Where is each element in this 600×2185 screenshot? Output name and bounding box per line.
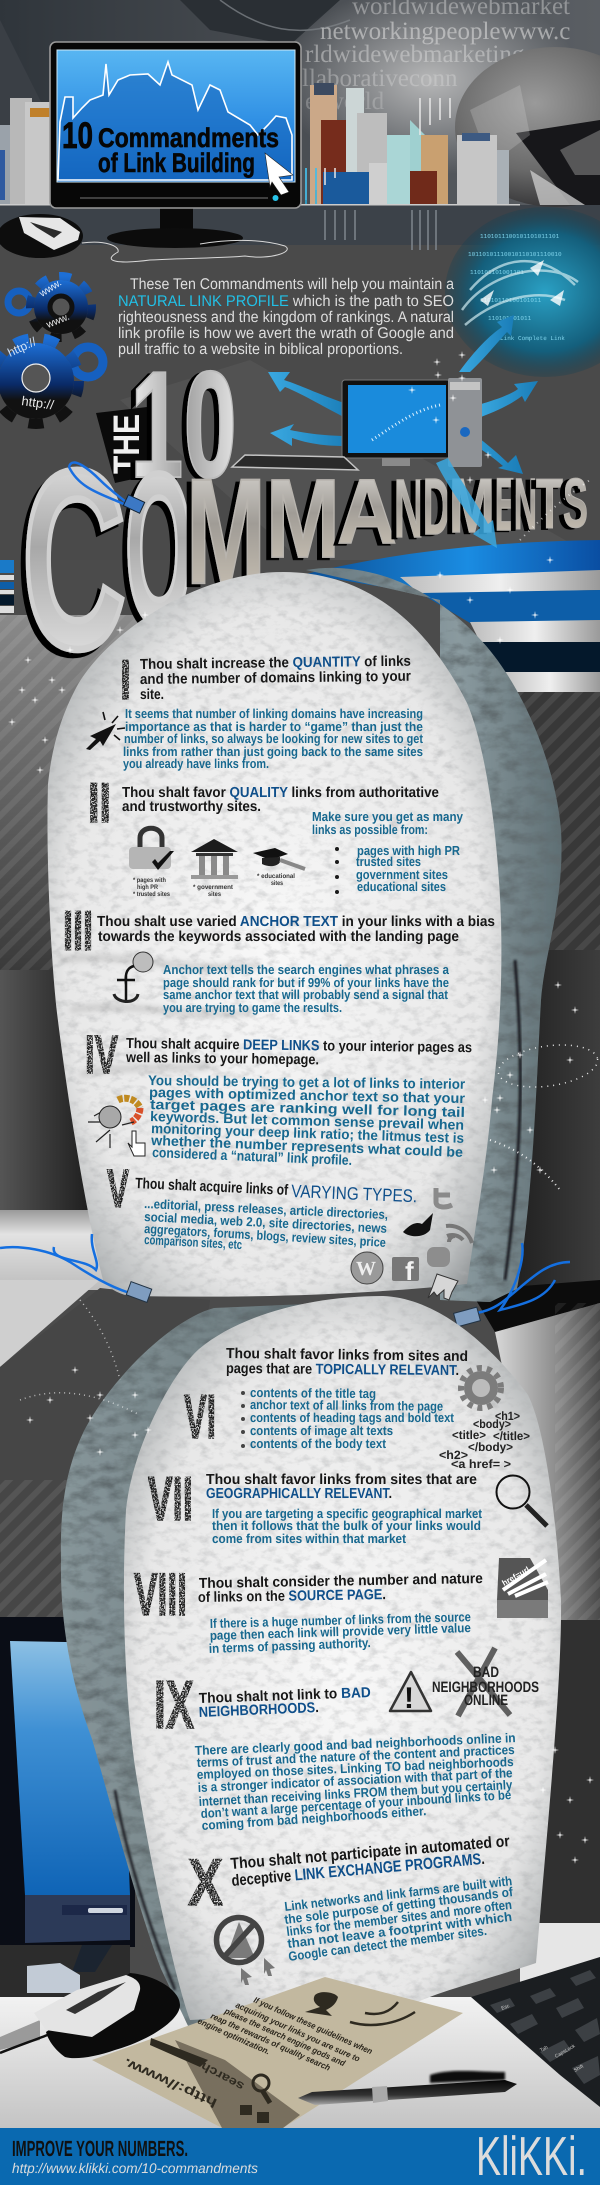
code tags: <body> [473, 1417, 511, 1431]
body text IX: don’t want a large percentage of your inbound links to be [200, 1787, 512, 1821]
note text: If you follow these guidelines when [252, 1995, 374, 2056]
icon captions: * pages with [133, 877, 166, 884]
body text I: It seems that number of linking domains have increasing [125, 706, 423, 721]
note text: reap the rewards of quality search [209, 2011, 332, 2073]
icon: keyboard: Shift [573, 2063, 585, 2074]
note doodles [150, 1992, 415, 2123]
icon: blue network cables [0, 1234, 570, 1327]
body text VII [212, 1506, 483, 1546]
icon captions [133, 873, 295, 898]
heading II: Thou shalt favor QUALITY links from authoritative [122, 785, 439, 801]
title: COMMANDMENTS: N [514, 463, 537, 545]
binary blue globe: 110101101001101 [470, 269, 524, 276]
intro paragraph: pull traffic to a website in biblical proportions. [118, 341, 403, 358]
icon: white cursor [265, 153, 293, 195]
body text X [284, 1873, 514, 1964]
icon: www gear: www. [44, 312, 71, 331]
icon: warning triangle: ! [404, 1682, 414, 1715]
body text IX: coming from bad neighborhoods either. [201, 1803, 427, 1833]
heading V: VARYING TYPES. [291, 1181, 418, 1206]
heading III [97, 914, 495, 945]
commandment VI [184, 1346, 530, 1471]
heading IV: well as links to your homepage. [125, 1050, 319, 1068]
numeral IV: IV [85, 1025, 118, 1085]
body text VI [250, 1385, 455, 1451]
title: COMMANDMENTS: O [125, 430, 193, 669]
binary blue globe: 10110101110010110101110010 [468, 251, 562, 258]
body text I: links from rather than just going back to the same sites [123, 744, 423, 759]
tablet one side [306, 568, 562, 1302]
body text IV: considered a “natural” link profile. [152, 1144, 352, 1168]
intro paragraph: righteousness and the kingdom of rankings. A natural [118, 309, 454, 326]
body text IX [195, 1730, 516, 1833]
note text: engine optimization. [196, 2016, 272, 2057]
icon captions: sites [271, 880, 283, 887]
background web words [302, 0, 570, 115]
body text III: same anchor text that will probably send a signal that [163, 987, 449, 1002]
tablet one face [47, 572, 501, 1297]
heading VI: pages that are TOPICALLY RELEVANT. [226, 1361, 459, 1379]
binary blue globe: 110101001011 [488, 315, 532, 322]
heading III: towards the keywords associated with the landing page [98, 929, 459, 945]
icon captions: high PR [137, 884, 158, 891]
monitor with title [50, 42, 301, 248]
intro paragraph: These Ten Commandments will help you maintain a [130, 276, 454, 293]
footer slogan: IMPROVE YOUR NUMBERS. [12, 2136, 188, 2161]
right city skyline [0, 83, 520, 250]
heading X: deceptive LINK EXCHANGE PROGRAMS. [231, 1851, 485, 1890]
body text III: you are trying to game the results. [163, 1000, 342, 1015]
icon: warning triangle [390, 1672, 431, 1715]
title: COMMANDMENTS: C [22, 419, 126, 703]
icon: keyboard [471, 1957, 600, 2107]
header backdrop [0, 0, 600, 560]
body text IX: terms of trust and the nature of the content and practices [197, 1742, 515, 1770]
side backdrops beside tablet one [0, 615, 600, 1930]
icon: www gear [8, 276, 92, 338]
body text II: government sites [356, 867, 448, 882]
body text V: ...editorial, press releases, article directories, [144, 1196, 388, 1222]
heading IX: Thou shalt not link to BAD [199, 1685, 371, 1707]
left city skyline [0, 98, 50, 205]
heading VIII [198, 1571, 483, 1606]
numeral V: V [107, 1159, 129, 1219]
icon: magnifier [496, 1476, 547, 1526]
ribbon stripes [0, 540, 600, 692]
body text IX: There are clearly good and bad neighborhoods online in [195, 1730, 516, 1758]
body text VI: contents of the body text [250, 1436, 387, 1451]
title: COMMANDMENTS: D [423, 462, 450, 552]
code tags: <title> [452, 1428, 486, 1442]
code tags [439, 1409, 530, 1471]
icon: clicking cursor [86, 712, 125, 750]
body text X: than not leave a footprint with which [287, 1909, 513, 1951]
icon: wordpress [351, 1252, 383, 1284]
body text VIII: in terms of passing authority. [209, 1635, 371, 1656]
body text II: educational sites [357, 879, 446, 894]
heading VIII: of links on the SOURCE PAGE. [198, 1587, 386, 1606]
title: COMMANDMENTS [22, 419, 588, 703]
body text VII: come from sites within that market [212, 1531, 407, 1546]
body text VII: If you are targeting a specific geographical market [212, 1506, 483, 1521]
note text [196, 1995, 374, 2073]
tablet two face [124, 1296, 561, 2020]
heading VII [206, 1472, 477, 1502]
numeral III: III [63, 899, 93, 962]
icon: link tray [497, 1558, 548, 1618]
body text IV: pages with optimized anchor text so that your [149, 1084, 466, 1106]
heading IV [125, 1036, 472, 1068]
commandment IX [154, 1648, 539, 1833]
icon: twitter [436, 1188, 452, 1207]
icon: bad neighborhoods stamp: BAD [473, 1664, 499, 1681]
note text: acquiring your links you are sure to [234, 2000, 362, 2064]
icon: anchor [114, 952, 153, 1003]
body text VI: contents of image alt texts [250, 1423, 393, 1438]
numeral I: I [120, 648, 131, 711]
commandment VII [148, 1465, 547, 1546]
heading X: Thou shalt not participate in automated or [230, 1833, 510, 1873]
commandment II [88, 771, 464, 898]
tablet two side [61, 1300, 400, 2030]
title: COMMANDMENTS: N [394, 462, 424, 555]
icon captions: * educational [257, 873, 295, 880]
icon: keyboard: CapsLock [554, 2043, 577, 2060]
title: COMMANDMENTS: M [186, 448, 266, 616]
note text: please the search engine gods and [222, 2005, 348, 2068]
left monitor [0, 1617, 135, 2000]
commandment V [107, 1159, 472, 1300]
numeral IX: IX [154, 1667, 194, 1743]
body text VI: anchor text of all links from the page [250, 1397, 443, 1414]
body text VIII: page then each link will provide very little value [210, 1620, 471, 1643]
icon: bird [403, 1213, 433, 1236]
icon: desk mouse [0, 1973, 180, 2058]
heading VII: Thou shalt favor links from sites that are [206, 1472, 477, 1488]
body text II [312, 809, 464, 894]
panel: tablet one [47, 568, 562, 1302]
heading II: and trustworthy sites. [122, 799, 261, 815]
icon captions: sites [208, 891, 221, 898]
title: 10: 10 [130, 340, 237, 510]
skyline outline on screen [58, 62, 292, 180]
numeral VIII: VIII [134, 1561, 187, 1628]
body text III [163, 962, 450, 1015]
icon: facebook: f [405, 1256, 414, 1286]
icon captions: * government [193, 884, 234, 891]
body text III: page should rank for but if 99% of your links have the [163, 975, 449, 990]
numeral II: II [88, 771, 111, 834]
doodle text: search: search [198, 2059, 246, 2094]
numeral VI: VI [184, 1383, 216, 1452]
body text II: Make sure you get as many [312, 809, 464, 824]
globe [455, 47, 600, 207]
icon: http gear: http:// [5, 334, 39, 360]
footer bar [0, 2125, 600, 2185]
icon: facebook [392, 1256, 419, 1286]
body text IV [148, 1072, 466, 1168]
commandment III [63, 899, 495, 1015]
title: COMMANDMENTS: M [449, 463, 495, 549]
body text I [123, 706, 424, 771]
icon: pen [298, 2071, 517, 2105]
body text IV: You should be trying to get a lot of links to interior [148, 1072, 466, 1092]
icon: keyboard: Esc [501, 2003, 511, 2012]
heading I: site. [140, 687, 164, 703]
icon: link hub with hand [88, 1098, 145, 1156]
body text II: links as possible from: [312, 822, 428, 837]
background web words: llaborativeconn [302, 65, 458, 92]
body text VI: contents of the title tag [250, 1385, 376, 1401]
heading I: and the number of domains linking to your [140, 669, 411, 688]
intro paragraph: NATURAL LINK PROFILE which is the path to SEO [118, 293, 454, 310]
code tags: <h2> [439, 1448, 468, 1462]
title: COMMANDMENTS: A [337, 460, 397, 563]
intro paragraph [118, 276, 454, 358]
icon: digg [428, 1274, 458, 1300]
arrow over letters [436, 458, 497, 548]
body text IV: target pages are ranking well for long tail [150, 1096, 465, 1120]
title: THE: THE [106, 414, 147, 474]
icon: www gear: www. [37, 278, 64, 300]
body text I: importance as that is harder to “game” than just the [125, 719, 423, 734]
commandment VIII [134, 1558, 548, 1656]
body text V [144, 1196, 388, 1252]
body text X: Link networks and link farms are built with [284, 1873, 513, 1914]
body text X: links for the member sites and more often [286, 1897, 513, 1939]
title: 10: 10 [62, 115, 93, 156]
body text IX: is a stronger indicator of association with that part of the [197, 1765, 513, 1795]
background web words: networkingpeoplewww.c [320, 18, 570, 45]
icon: lock with check [129, 828, 174, 870]
body text IV: whether the number represents what could be [150, 1132, 463, 1160]
icon: wordpress: W [356, 1258, 376, 1280]
body text I: you already have links from. [123, 756, 269, 771]
heading IX [198, 1685, 371, 1721]
blue arrows [268, 315, 538, 474]
heading I [140, 654, 411, 703]
heading I: Thou shalt increase the QUANTITY of links [140, 654, 411, 673]
title: of Link Building: of Link Building [98, 148, 255, 178]
bullets VI [241, 1391, 245, 1448]
heading VIII: Thou shalt consider the number and nature [199, 1571, 483, 1592]
bullets II [335, 847, 339, 894]
icon: top mouse [0, 214, 287, 262]
icon: blogger [427, 1247, 450, 1267]
body text V: comparison sites, etc [144, 1232, 242, 1252]
heading VI: Thou shalt favor links from sites and [226, 1346, 468, 1365]
code tags: </body> [468, 1440, 513, 1454]
body text IV: monitoring your deep link ratio; the litmus test is [151, 1120, 464, 1146]
commandment IV [85, 1025, 472, 1168]
icon: graduation cap [253, 848, 305, 869]
body text II: pages with high PR [357, 843, 461, 858]
title: COMMANDMENTS: T [536, 464, 563, 544]
heading IV: Thou shalt acquire DEEP LINKS to your interior pages as [126, 1036, 472, 1056]
commandment X [188, 1833, 514, 1985]
code tags: <h1> [495, 1409, 520, 1423]
doodle text: http: http://www. [121, 2055, 219, 2111]
heading III: Thou shalt use varied ANCHOR TEXT in your links with a bias [97, 914, 495, 930]
heading IX: NEIGHBORHOODS. [198, 1700, 319, 1721]
icon: http gear: http:// [21, 393, 55, 413]
heading V: Thou shalt acquire links of [135, 1175, 289, 1199]
code tags: </title> [493, 1429, 530, 1443]
numeral VII: VII [148, 1465, 193, 1534]
code tags: <a href= > [451, 1457, 511, 1471]
body text X: Google can detect the member sites. [287, 1923, 488, 1964]
desk [0, 1923, 600, 2128]
body text IX: employed on those sites. Linking TO bad neighborhoods [197, 1754, 514, 1782]
icon: bad neighborhoods stamp [432, 1648, 539, 1716]
body text V: social media, web 2.0, site directories, news [144, 1209, 387, 1236]
title: Commandments: Commandments [98, 123, 279, 153]
body text X: the sole purpose of getting thousands of [284, 1884, 514, 1927]
title: COMMANDMENTS: E [495, 462, 515, 546]
body text IX: internet than receiving links FROM them but you certainly [198, 1777, 513, 1809]
body text V: aggregators, forums, blogs, review sites, price [144, 1221, 386, 1250]
body text VII: then it follows that the bulk of your links would [212, 1518, 481, 1533]
body text VI: contents of heading tags and bold text [250, 1410, 455, 1425]
icon: rss [446, 1226, 472, 1243]
computer [232, 378, 482, 470]
icon: bad neighborhoods stamp: ONLINE [464, 1692, 508, 1709]
icon: gear [461, 1368, 501, 1408]
heading II [122, 785, 439, 815]
binary blue globe [445, 207, 600, 377]
heading VI [226, 1346, 468, 1379]
body text IV: keywords. But let common sense prevail when [150, 1108, 464, 1133]
panel: tablet two [61, 1296, 561, 2030]
body text I: number of links, so always be looking for new sites to get [124, 731, 424, 746]
binary blue globe: Link Complete Link [500, 335, 565, 342]
background web words: esworld [305, 88, 385, 115]
icon: link tray: href=url [500, 1565, 531, 1588]
heading VII: GEOGRAPHICALLY RELEVANT. [206, 1486, 392, 1502]
icon: government building [191, 839, 238, 879]
footer url: http://www.klikki.com/10-commandments [12, 2160, 258, 2176]
title: COMMANDMENTS: M [266, 456, 340, 582]
paper note [92, 1977, 463, 2128]
icon: http gear [0, 334, 103, 424]
background web words: rldwidewebmarketing [305, 41, 525, 68]
icon captions: * trusted sites [133, 891, 170, 898]
title: THE [96, 407, 151, 483]
icon: no link farms [216, 1918, 275, 1985]
body text VIII: If there is a huge number of links from the source [210, 1609, 471, 1631]
intro paragraph: link profile is how we avert the wrath of Google and [118, 325, 454, 342]
cable on title [69, 463, 145, 513]
icon: bad neighborhoods stamp: NEIGHBORHOODS [432, 1679, 539, 1696]
numeral X: X [188, 1845, 223, 1919]
body text VIII [209, 1609, 471, 1656]
body text II: trusted sites [356, 854, 421, 869]
commandment I [86, 648, 424, 771]
binary blue globe: 11010110100101011 [480, 297, 542, 304]
icon: keyboard [232, 455, 358, 470]
heading V [135, 1175, 418, 1206]
body text III: Anchor text tells the search engines what phrases a [163, 962, 450, 977]
binary blue globe: 1101011100101101011101 [480, 233, 560, 240]
icon: keyboard: Tab [539, 2045, 549, 2054]
